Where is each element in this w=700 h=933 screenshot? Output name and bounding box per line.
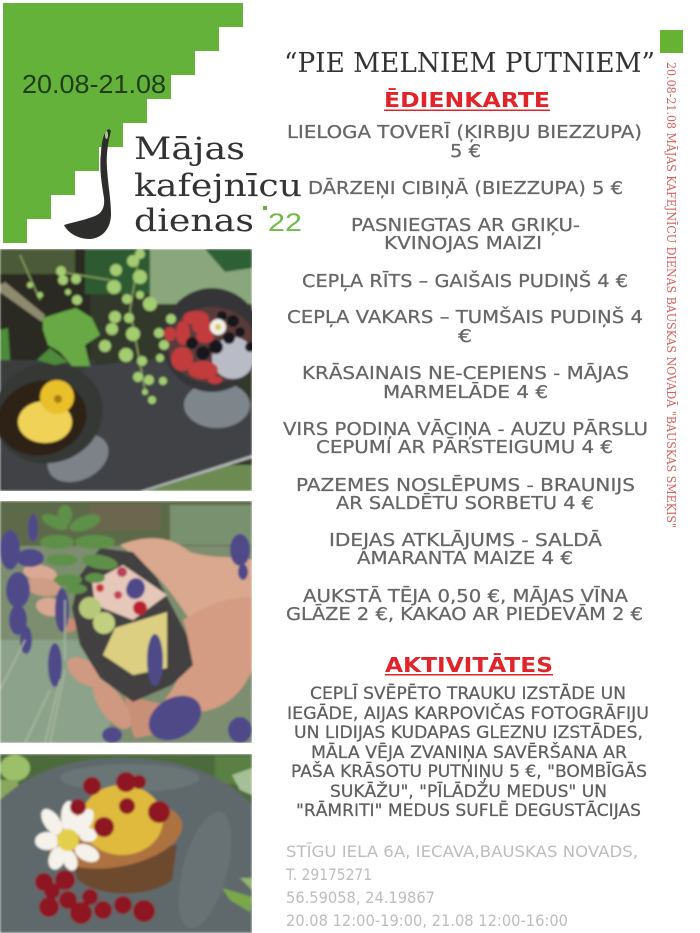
activities text block: IEGĀDE, AIJAS KARPOVIČAS FOTOGRĀFIJU [287, 702, 649, 724]
activities text block: MĀLA VĒJA ZVANIŅA SAVĒRŠANA AR [311, 741, 627, 763]
icon: ladle [64, 129, 111, 239]
heading: Aktivitātes: AKTIVITĀTES [385, 653, 553, 677]
activities text block: CEPLĪ SVĒPĒTO TRAUKU IZSTĀDE UN [310, 682, 626, 704]
leaves [222, 888, 252, 912]
contact details [285, 842, 638, 930]
menu item [283, 418, 648, 458]
menu list [283, 121, 648, 625]
activities text block: PAŠA KRĀSOTU PUTNIŅU 5 €, "BOMBĪGĀS [291, 760, 647, 782]
leaves [40, 505, 119, 594]
activities text block [287, 682, 649, 821]
contact details: 56.59058, 24.19867 [286, 888, 435, 907]
menu item: DĀRZEŅI CIBIŅĀ (BIEZZUPA) 5 € [308, 177, 623, 199]
tart [70, 845, 177, 894]
menu item: PAZEMES NOSLĒPUMS - BRAUNIJS [296, 474, 635, 496]
hands [120, 538, 252, 620]
menu item [302, 362, 629, 403]
menu item: KVINOJAS MAIZI [384, 234, 542, 254]
left pot [46, 434, 110, 484]
menu item: AUKSTĀ TĒJA 0,50 €, MĀJAS VĪNA [303, 585, 628, 607]
menu item [287, 306, 643, 347]
logo wordmark: dienas [134, 203, 254, 239]
contact details: T. 29175271 [285, 865, 372, 884]
menu item: LIELOGA TOVERĪ (ĶIRBJU BIEZZUPA) [287, 121, 642, 143]
contact details: STĪGU IELA 6A, IECAVA,BAUSKAS NOVADS, [286, 842, 638, 861]
berries [35, 772, 170, 924]
menu item: CEPĻA RĪTS – GAIŠAIS PUDIŅŠ 4 € [302, 270, 628, 292]
logo: Mājas kafejnīcu dienas '22 [64, 129, 302, 239]
plate [72, 548, 193, 702]
leaf [43, 308, 100, 366]
logo wordmark: kafejnīcu [134, 168, 302, 204]
menu item: AR SALDĒTU SORBETU 4 € [336, 492, 594, 514]
photo: tart with berries on black plate [0, 754, 252, 933]
activities text block: UN LIDIJAS KUDAPAS GLEZNU IZSTĀDES, [294, 721, 643, 743]
vertical side text: 20.08-21.08 MĀJAS KAFEJNĪCU DIENAS BAUSKAS NOVADĀ "BAUSKAS SMEĶIS" [664, 62, 679, 528]
menu item: KRĀSAINAIS NE-CEPIENS - MĀJAS [302, 362, 629, 384]
lavender [0, 514, 252, 749]
logo year: 22 [268, 209, 302, 237]
menu item [286, 585, 643, 625]
menu item: CEPĻA VAKARS – TUMŠAIS PUDIŅŠ 4 [287, 306, 643, 328]
title: “PIE MELNIEM PUTNIEM” [284, 48, 655, 79]
right pot [184, 382, 250, 428]
menu item: PASNIEGTAS AR GRIĶU- [351, 216, 580, 236]
menu item: AMARANTA MAIZE 4 € [357, 549, 573, 569]
green staircase shape [3, 3, 243, 243]
menu item: 5 € [450, 142, 481, 162]
logo year [263, 206, 302, 237]
activities text block: SUKĀŽU", "PĪLĀDŽU MEDUS" UN [330, 780, 607, 802]
logo wordmark [134, 131, 302, 239]
menu item [296, 474, 635, 514]
flower [35, 801, 102, 873]
contact details: 20.08 12:00-19:00, 21.08 12:00-16:00 [286, 911, 568, 930]
menu item: MARMELĀDE 4 € [383, 381, 548, 403]
menu item [351, 216, 580, 254]
menu item [329, 529, 602, 569]
menu item: € [458, 327, 472, 347]
menu item: VIRS PODIŅA VĀCIŅA - AUZU PĀRSLU [283, 418, 648, 440]
cake pieces [92, 565, 167, 620]
photo: hands holding dessert among lavender [0, 501, 252, 749]
menu item: GLĀZE 2 €, KAKAO AR PIEDEVĀM 2 € [286, 603, 643, 625]
plate [0, 758, 252, 933]
date on staircase: 20.08-21.08 [22, 69, 166, 99]
activities text block: "RĀMRITI" MEDUS SUFLĒ DEGUSTĀCIJAS [296, 799, 641, 821]
photo: black pots with dessert and grapes [0, 249, 262, 491]
grapes [20, 250, 145, 390]
green square [660, 30, 683, 53]
logo wordmark: Mājas [134, 131, 245, 167]
menu item: CEPUMI AR PĀRSTEIGUMU 4 € [316, 436, 613, 458]
menu item: IDEJAS ATKLĀJUMS - SALDĀ [329, 529, 602, 551]
menu item [287, 121, 642, 162]
heading: Ēdienkarte: ĒDIENKARTE [384, 88, 550, 112]
